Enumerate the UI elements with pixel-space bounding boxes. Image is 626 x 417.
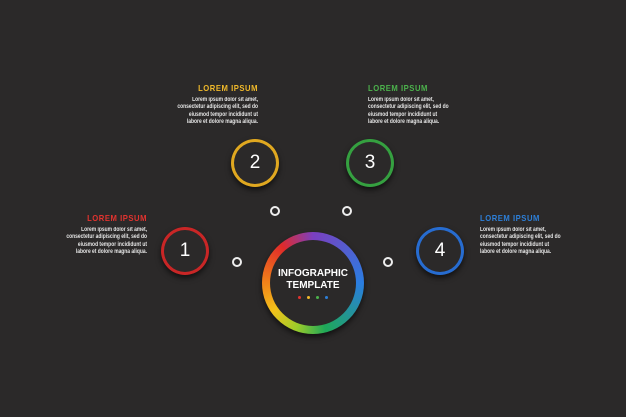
text: step 4: LOREM IPSUM (480, 213, 540, 223)
text: step 4: Lorem ipsum dolor sit amet, (480, 227, 546, 233)
text: step 2: consectetur adipiscing elit, sed do (177, 104, 258, 110)
text: step 4: eiusmod tempor incididunt ut (480, 242, 549, 248)
circle 4: 4 (435, 240, 445, 261)
text: step 1: consectetur adipiscing elit, sed do (66, 234, 147, 240)
central circle (262, 232, 364, 334)
text: step 2 (177, 83, 258, 125)
circle 3 (346, 139, 394, 187)
text: step 2: labore et dolore magna aliqua. (187, 119, 258, 125)
text: step 3: LOREM IPSUM (368, 83, 428, 93)
text: step 3: Lorem ipsum dolor sit amet, (368, 97, 434, 103)
text: step 1: Lorem ipsum dolor sit amet, (81, 227, 147, 233)
text: step 2: eiusmod tempor incididunt ut (189, 112, 258, 118)
text: step 3: labore et dolore magna aliqua. (368, 119, 439, 125)
circle 1 (161, 227, 209, 275)
text: step 2: Lorem ipsum dolor sit amet, (192, 97, 258, 103)
text: step 2: LOREM IPSUM (198, 83, 258, 93)
text: step 3: consectetur adipiscing elit, sed do (368, 104, 449, 110)
central circle: TEMPLATE (286, 280, 340, 290)
text: step 1: LOREM IPSUM (87, 213, 147, 223)
circle 2: 2 (250, 152, 260, 173)
text: step 3: eiusmod tempor incididunt ut (368, 112, 437, 118)
text: step 1: labore et dolore magna aliqua. (76, 249, 147, 255)
circle 4 (416, 227, 464, 275)
circle 1: 1 (180, 240, 190, 261)
text: step 4: labore et dolore magna aliqua. (480, 249, 551, 255)
circle 3: 3 (365, 152, 375, 173)
central circle: INFOGRAPHIC (278, 268, 348, 278)
text: step 3 (368, 83, 449, 125)
text: step 1 (66, 213, 147, 255)
text: step 1: eiusmod tempor incididunt ut (78, 242, 147, 248)
circle 2 (231, 139, 279, 187)
text: step 4 (480, 213, 561, 255)
text: step 4: consectetur adipiscing elit, sed do (480, 234, 561, 240)
